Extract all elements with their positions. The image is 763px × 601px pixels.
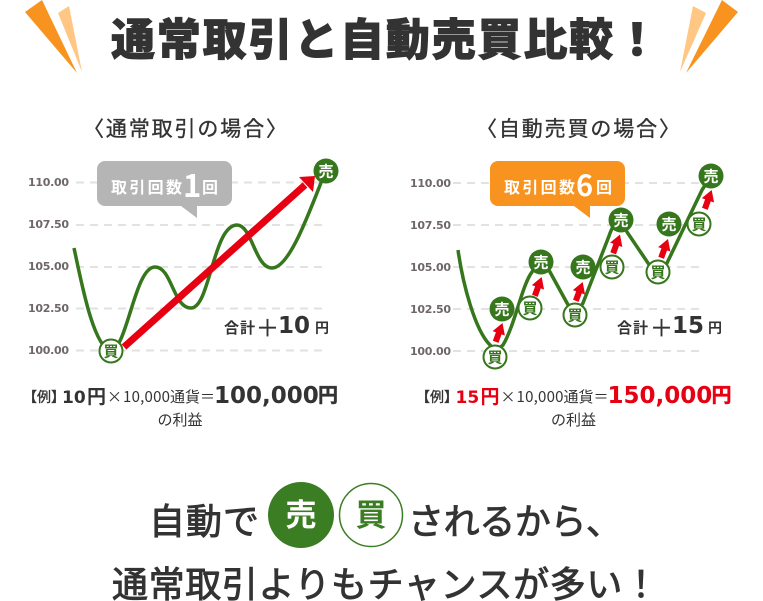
axis labels: 110.00 — [410, 177, 451, 190]
example: profit 100,000 yen — [23, 383, 338, 429]
marker labels: sell: 売 — [703, 168, 719, 186]
icon: right orange burst — [680, 0, 738, 73]
callout: 1 trade: 取引回数 — [111, 179, 182, 197]
example: profit 100,000 yen: 10 — [62, 388, 86, 408]
axis labels — [28, 176, 69, 357]
example: profit 100,000 yen: 100,000 — [214, 383, 319, 409]
callout: 6 trades: 回 — [596, 180, 612, 197]
marker: buy — [100, 340, 122, 362]
axis labels — [410, 177, 451, 358]
grid lines — [76, 182, 326, 350]
marker labels: buy: 買 — [691, 216, 707, 234]
axis labels: 110.00 — [28, 176, 69, 189]
marker labels: buy: 買 — [650, 264, 666, 282]
example: profit 150,000 yen: × — [500, 386, 516, 407]
markers: sell — [490, 164, 724, 322]
marker: sell: 売 — [318, 164, 334, 180]
axis labels: 107.50 — [410, 219, 451, 232]
conclusion line 1 end: されるから、 — [408, 501, 622, 542]
example: profit 100,000 yen: 10,000 — [123, 386, 170, 407]
example: profit 150,000 yen: 15 — [456, 388, 479, 408]
axis labels: 102.50 — [410, 303, 451, 316]
marker labels: buy — [487, 216, 707, 366]
total: +15 yen: 円 — [708, 320, 722, 336]
price line — [458, 176, 711, 348]
callout: 1 trade — [97, 161, 232, 218]
badge: buy: 買 — [356, 498, 386, 533]
axis labels: 105.00 — [410, 261, 451, 274]
badge: buy — [340, 484, 402, 546]
total: +10 yen: 10 — [278, 313, 310, 339]
axis labels: 102.50 — [28, 302, 69, 315]
heading: automated trading: 〈自動売買の場合〉 — [476, 118, 680, 141]
callout: 1 trade: 1 — [183, 161, 201, 206]
markers: buy — [484, 212, 710, 368]
price line — [74, 170, 326, 352]
arrow: buy to sell — [124, 176, 315, 347]
example: profit 100,000 yen: 【例】 — [23, 389, 65, 405]
example: profit 100,000 yen: 円 — [318, 385, 338, 407]
example: profit 150,000 yen: ＝ — [594, 386, 609, 407]
marker labels: sell — [494, 168, 719, 318]
callout: 1 trade: 回 — [202, 180, 218, 197]
marker labels: sell: 売 — [613, 212, 629, 230]
example: profit 100,000 yen: 通貨 — [170, 386, 200, 407]
panel: normal trading — [23, 118, 338, 429]
total: +15 yen: ＋ — [650, 309, 673, 343]
marker labels: sell: 売 — [575, 260, 591, 276]
badge: sell — [268, 482, 334, 548]
marker labels: sell: 売 — [494, 302, 510, 318]
callout: 6 trades — [490, 161, 625, 218]
example: profit 150,000 yen: の利益 — [551, 412, 596, 429]
example: profit 100,000 yen: × — [107, 386, 122, 407]
conclusion line 1 start: 自動で — [149, 501, 259, 542]
example: profit 100,000 yen: 円 — [87, 387, 106, 408]
marker: buy: 買 — [103, 344, 119, 360]
example: profit 100,000 yen: ＝ — [200, 386, 215, 407]
example: profit 150,000 yen: 通貨 — [564, 386, 594, 407]
marker labels: buy: 買 — [604, 260, 620, 276]
title: 通常取引と自動売買比較！ — [111, 16, 659, 65]
axis labels: 100.00 — [410, 345, 451, 358]
example: profit 150,000 yen: 150,000 — [608, 383, 712, 409]
axis labels: 100.00 — [28, 344, 69, 357]
example: profit 150,000 yen: 円 — [480, 387, 500, 408]
arrows: buy to sell — [490, 188, 718, 344]
total: +10 yen: 円 — [315, 320, 329, 336]
icon: left orange burst — [25, 0, 82, 73]
axis labels: 107.50 — [28, 218, 69, 231]
total: +15 yen — [617, 309, 722, 343]
marker labels: buy: 買 — [522, 300, 538, 318]
total: +10 yen: 合計 — [224, 320, 255, 337]
total: +15 yen: 合計 — [617, 320, 648, 337]
example: profit 150,000 yen: 10,000 — [516, 386, 564, 407]
example: profit 100,000 yen: の利益 — [157, 412, 203, 429]
conclusion — [112, 482, 659, 601]
callout: 6 trades: 6 — [576, 163, 593, 205]
axis labels: 105.00 — [28, 260, 69, 273]
badge: sell: 売 — [286, 498, 316, 533]
example: profit 150,000 yen — [416, 383, 732, 429]
example: profit 150,000 yen: 【例】 — [416, 389, 458, 405]
marker labels: buy: 買 — [487, 350, 503, 366]
heading: normal trading: 〈通常取引の場合〉 — [83, 118, 287, 141]
total: +10 yen — [224, 309, 329, 343]
marker: sell — [314, 158, 338, 184]
callout: 6 trades: 取引回数 — [504, 179, 575, 197]
example: profit 150,000 yen: 円 — [712, 385, 732, 407]
marker labels: sell: 売 — [661, 216, 677, 234]
grid lines — [453, 183, 705, 351]
marker labels: sell: 売 — [533, 254, 549, 272]
panel: automated trading — [410, 118, 732, 429]
total: +10 yen: ＋ — [256, 309, 279, 343]
marker labels: buy: 買 — [567, 308, 583, 324]
total: +15 yen: 15 — [672, 313, 704, 339]
